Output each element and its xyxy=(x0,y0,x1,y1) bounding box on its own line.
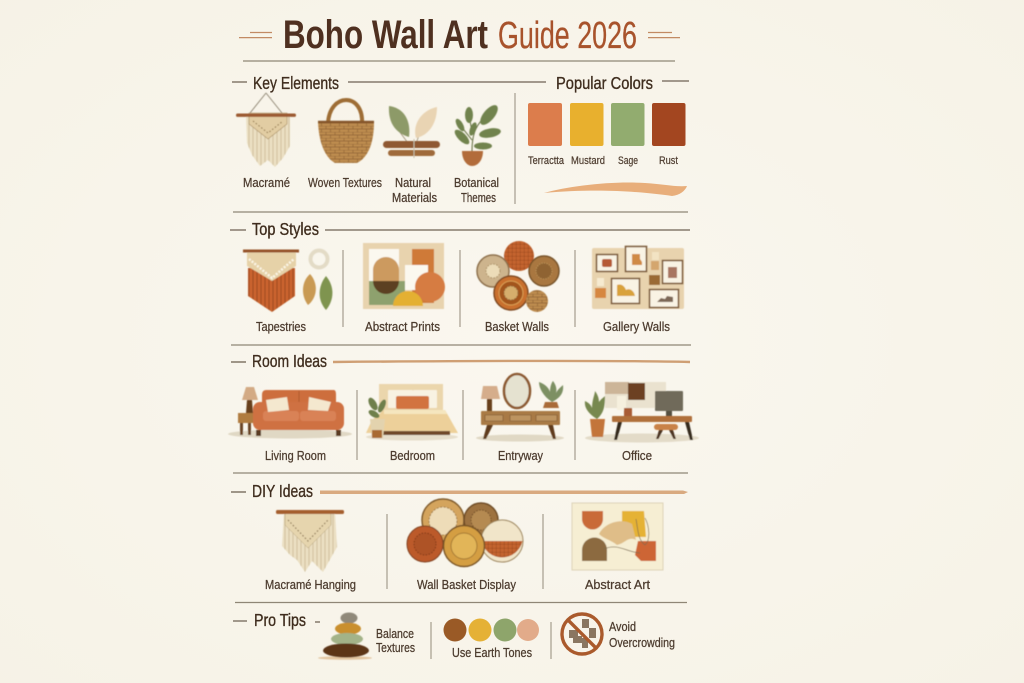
heading: popular colors: Popular Colors xyxy=(556,73,653,93)
brush stroke xyxy=(544,183,687,196)
illustration: bedroom xyxy=(366,384,458,440)
heading: top styles: Top Styles xyxy=(252,219,319,239)
labels: key elements: Natural xyxy=(395,176,431,190)
tip: balance textures xyxy=(376,627,415,655)
labels: top styles: Abstract Prints xyxy=(365,320,440,334)
swatch: sage xyxy=(611,103,644,167)
icon: macrame xyxy=(236,93,296,167)
heading: diy ideas xyxy=(231,481,688,501)
labels: top styles: Basket Walls xyxy=(485,320,549,334)
labels: key elements: Themes xyxy=(461,191,496,205)
icon: botanical themes xyxy=(452,102,502,166)
illustration: living room xyxy=(228,387,352,438)
labels: room ideas: Living Room xyxy=(265,449,326,463)
icon: avoid overcrowding xyxy=(562,614,602,654)
panel: pro tips xyxy=(233,610,675,660)
labels: key elements: Woven Textures xyxy=(308,176,382,190)
illustration: entryway xyxy=(476,374,564,442)
icon: woven basket xyxy=(318,100,374,163)
swatch: terracotta xyxy=(528,103,565,167)
swatch: terracotta: Terractta xyxy=(528,155,565,167)
labels: room ideas: Bedroom xyxy=(390,449,435,463)
icon: tapestry xyxy=(243,250,332,312)
labels: diy ideas: Abstract Art xyxy=(585,578,651,592)
labels: top styles: Gallery Walls xyxy=(603,320,670,334)
swatch: rust: Rust xyxy=(659,155,678,167)
title xyxy=(239,13,680,57)
labels: diy ideas: Macramé Hanging xyxy=(265,578,356,592)
panel: popular colors xyxy=(528,73,689,196)
icon: earth tone dots xyxy=(444,618,539,642)
labels: room ideas: Entryway xyxy=(498,449,544,463)
swatch: mustard xyxy=(570,103,605,167)
title: Guide 2026 xyxy=(498,15,637,57)
swatch: sage: Sage xyxy=(618,155,638,167)
labels: diy ideas xyxy=(265,578,651,592)
heading: diy ideas: DIY Ideas xyxy=(252,481,313,501)
labels: key elements: Macramé xyxy=(243,176,290,190)
swatch: rust xyxy=(652,103,686,167)
labels: key elements xyxy=(243,176,499,205)
icon: balanced stones xyxy=(318,612,372,660)
icon: natural materials xyxy=(383,106,440,158)
icon: gallery walls xyxy=(592,246,684,309)
labels: top styles xyxy=(256,320,670,334)
tip: balance textures: Textures xyxy=(376,641,415,655)
tip: avoid overcrowding xyxy=(609,620,675,650)
title: Boho Wall Art xyxy=(283,13,488,57)
labels: top styles: Tapestries xyxy=(256,320,306,334)
heading: pro tips: Pro Tips xyxy=(254,610,306,630)
labels: key elements: Botanical xyxy=(454,176,499,190)
icon: abstract art xyxy=(572,503,663,570)
heading: room ideas: Room Ideas xyxy=(252,351,327,371)
icon: macrame hanging xyxy=(276,510,344,572)
icon: wall basket display xyxy=(407,499,523,566)
panel: key elements xyxy=(232,73,546,205)
labels: room ideas: Office xyxy=(622,449,652,463)
panel: top styles xyxy=(230,219,690,334)
heading: key elements: Key Elements xyxy=(253,73,339,93)
tip: balance textures: Balance xyxy=(376,627,414,641)
illustration: office xyxy=(585,382,699,442)
tip: avoid overcrowding: Overcrowding xyxy=(609,636,675,650)
icon: abstract prints xyxy=(363,243,445,309)
labels: room ideas xyxy=(265,449,652,463)
swatch: mustard: Mustard xyxy=(571,155,605,167)
panel: room ideas xyxy=(228,351,699,463)
labels: key elements: Materials xyxy=(392,191,437,205)
tip: use earth tones: Use Earth Tones xyxy=(452,646,532,660)
labels: diy ideas: Wall Basket Display xyxy=(417,578,517,592)
tip: avoid overcrowding: Avoid xyxy=(609,620,636,634)
icon: basket walls xyxy=(477,241,559,312)
panel: diy ideas xyxy=(231,481,688,592)
